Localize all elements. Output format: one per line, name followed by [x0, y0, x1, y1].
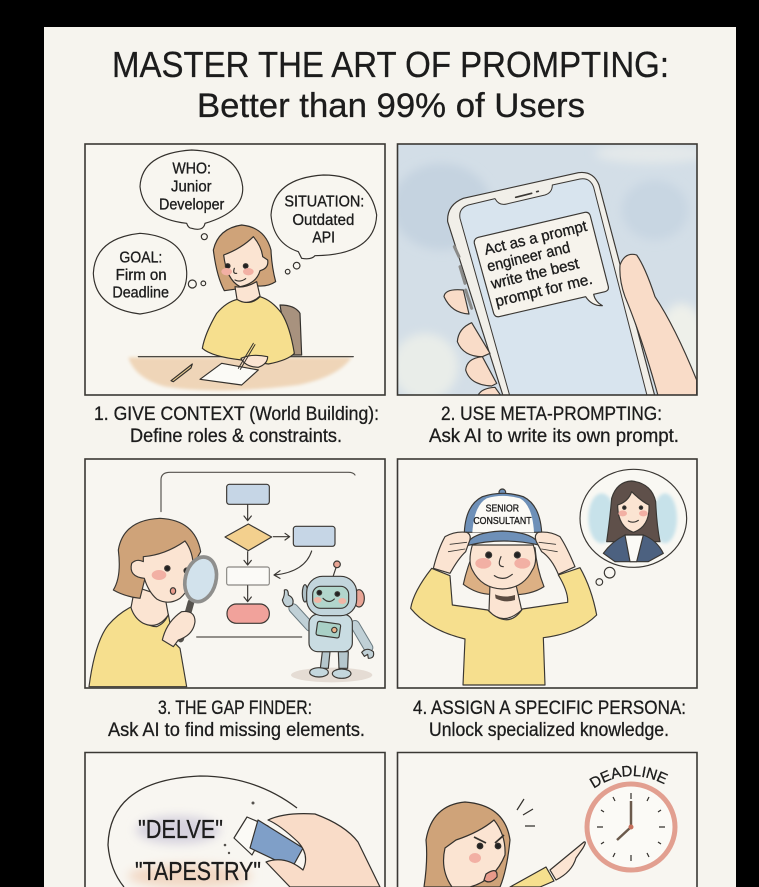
title	[112, 44, 669, 125]
face	[224, 237, 268, 287]
panel 3 frame	[85, 459, 385, 688]
speech bubble with prompt: prompt for me.	[494, 271, 594, 311]
panel 4 frame	[398, 459, 697, 688]
thumb	[620, 254, 697, 397]
caption 3: Ask AI to find missing elements.	[108, 719, 365, 741]
whiteboard outline	[161, 472, 355, 637]
hand and pen	[238, 343, 268, 369]
woman: head	[113, 518, 201, 625]
cap: senior consultant: SENIOR	[486, 504, 519, 515]
word: delve: "DELVE"	[138, 814, 223, 844]
bubble: who	[140, 150, 243, 240]
chair	[280, 305, 302, 355]
panel 6 frame	[398, 752, 697, 887]
title: MASTER THE ART OF PROMPTING:	[112, 44, 669, 85]
eraser	[234, 817, 303, 868]
panel 5 background	[85, 752, 385, 887]
caption 4	[413, 697, 686, 741]
speech bubble with prompt	[474, 212, 608, 317]
loose pen	[171, 364, 192, 382]
panel 6: deadline	[423, 766, 678, 887]
neck	[235, 282, 260, 302]
eyes and smile	[221, 264, 254, 281]
bubble text: Developer	[159, 196, 225, 213]
eraser crumbs	[224, 802, 254, 854]
bubble text: Firm on	[116, 267, 167, 284]
bubble: goal	[93, 233, 206, 314]
bubble: situation	[271, 175, 377, 274]
caption 2: Ask AI to write its own prompt.	[429, 425, 679, 447]
panel 1 frame	[85, 144, 385, 395]
hair	[463, 548, 544, 595]
erased bubble outline	[108, 776, 297, 887]
sweater	[202, 297, 294, 364]
panel 3: gap finder	[86, 459, 385, 688]
caption 2	[429, 403, 679, 447]
deadline label	[592, 776, 674, 790]
thought bubble: persona woman	[580, 469, 687, 585]
panel 5: banned words	[85, 752, 385, 887]
phone	[448, 172, 655, 397]
deadline text: DEADLINE	[589, 766, 668, 788]
fingers	[444, 290, 502, 397]
caption 3: 3. THE GAP FINDER:	[158, 697, 312, 719]
woman	[424, 802, 585, 887]
bubble text: SITUATION:	[284, 194, 364, 211]
woman: sweater and neck	[89, 607, 187, 687]
face	[470, 545, 536, 589]
word washes	[128, 816, 252, 887]
robot	[282, 561, 374, 682]
speech bubble with prompt: engineer and	[485, 239, 572, 276]
panel 5 frame	[85, 752, 385, 887]
word: tapestry: "TAPESTRY"	[135, 856, 261, 886]
panel 2 frame	[398, 144, 697, 395]
bubble text: Deadline	[112, 284, 169, 301]
desk	[128, 357, 353, 390]
speech bubble with prompt: Act as a prompt	[483, 218, 589, 259]
hand with arm	[162, 611, 195, 647]
flowchart	[225, 484, 335, 623]
hands on brim	[433, 532, 575, 574]
emphasis marks	[517, 799, 535, 826]
cap: senior consultant	[464, 489, 542, 546]
caption 1: 1. GIVE CONTEXT (World Building):	[94, 403, 379, 425]
title: Better than 99% of Users	[197, 87, 585, 125]
bubble text: WHO:	[172, 160, 211, 177]
bubble text: Junior	[171, 179, 212, 196]
neck	[489, 583, 522, 619]
panel 2: meta-prompting	[392, 143, 708, 403]
panel 1: give context	[85, 144, 385, 395]
speech bubble with prompt: write the best	[488, 255, 581, 293]
cap: senior consultant: CONSULTANT	[473, 516, 532, 527]
caption 1: Define roles & constraints.	[130, 425, 342, 447]
panel 4: persona	[410, 468, 688, 686]
caption 4: 4. ASSIGN A SPECIFIC PERSONA:	[413, 697, 686, 719]
caption 1	[94, 403, 379, 447]
notepad	[200, 363, 258, 385]
bubble text: GOAL:	[119, 250, 162, 267]
bubble text: API	[312, 230, 335, 247]
bubble text	[112, 160, 364, 301]
hand	[266, 814, 380, 887]
bubble text: Outdated	[292, 212, 354, 229]
caption 2: 2. USE META-PROMPTING:	[441, 403, 662, 425]
caption 3	[108, 697, 365, 741]
sweater	[411, 568, 597, 685]
hair back	[213, 225, 276, 291]
caption 4: Unlock specialized knowledge.	[429, 719, 669, 741]
magnifying glass	[180, 554, 221, 639]
watercolour washes	[392, 143, 708, 403]
clock	[587, 784, 675, 870]
panel 6 background	[397, 752, 697, 887]
